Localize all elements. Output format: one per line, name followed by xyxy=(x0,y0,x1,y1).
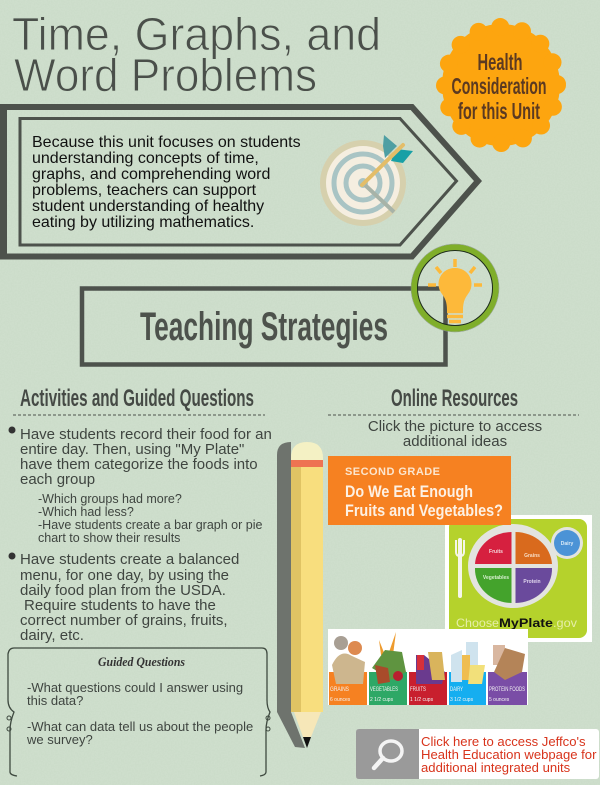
text block: second activity: Have students create a balanced xyxy=(20,551,239,568)
text: jeffco link: Health Education webpage for xyxy=(421,747,597,762)
image: choose my plate xyxy=(445,515,592,642)
text: click the picture xyxy=(368,418,542,450)
text: unit focus: student understanding of healthy xyxy=(32,198,264,215)
image: food groups: FRUITS xyxy=(410,687,426,693)
text block: first activity xyxy=(8,426,272,545)
text: unit focus: understanding concepts of time, xyxy=(32,150,259,167)
badge: health consideration: Health xyxy=(478,49,522,75)
image: food groups: 2 1/2 cups xyxy=(370,697,394,703)
heading: online resources: Online Resources xyxy=(391,385,518,412)
icon: light bulb in green ring xyxy=(411,244,499,332)
heading: guided questions: Guided Questions xyxy=(98,654,185,669)
text block: first activity: -Which had less? xyxy=(38,505,134,519)
image: second grade banner: SECOND GRADE xyxy=(345,466,440,478)
image: food groups: VEGETABLES xyxy=(370,687,398,693)
text block: first activity: -Which groups had more? xyxy=(38,492,182,506)
image: choose my plate: MyPlate xyxy=(499,616,553,630)
heading: activities and guided questions: Activities and Guided Questions xyxy=(20,385,254,412)
text: guided questions list: this data? xyxy=(27,693,83,708)
icon: pencil xyxy=(277,442,323,748)
text: guided questions list: -What questions could I answer using xyxy=(27,680,243,695)
image: choose my plate: Fruits xyxy=(489,549,503,555)
text: click the picture: additional ideas xyxy=(403,433,507,450)
image: food groups: 6 ounces xyxy=(330,697,351,703)
panel: guided questions xyxy=(7,648,270,776)
text: unit focus: problems, teachers can support xyxy=(32,182,257,199)
text block: first activity: entire day. Then, using "My Plate" xyxy=(20,441,244,458)
text block: first activity: chart to show their results xyxy=(38,531,180,545)
image: food groups: 3 1/2 cups xyxy=(450,697,474,703)
text block: second activity xyxy=(8,551,239,644)
callout: jeffco link xyxy=(356,729,599,779)
text: guided questions list xyxy=(26,680,253,747)
image: food groups xyxy=(328,629,528,705)
text block: second activity: correct number of grains, fruits, xyxy=(20,612,228,629)
panel: teaching strategies heading: Teaching Strategies xyxy=(140,305,388,349)
text: guided questions list: we survey? xyxy=(26,732,93,747)
image: food groups: 5 ounces xyxy=(489,697,510,703)
image: food groups: 1 1/2 cups xyxy=(410,697,434,703)
panel: teaching strategies heading xyxy=(82,288,446,364)
image: second grade banner: Do We Eat Enough xyxy=(345,482,473,501)
text: unit focus: eating by utilizing mathematics. xyxy=(32,214,254,231)
arrow panel: unit focus xyxy=(0,104,478,259)
image: choose my plate: Vegetables xyxy=(483,575,509,581)
badge: health consideration: for this Unit xyxy=(458,98,540,124)
text: jeffco link: additional integrated units xyxy=(421,760,571,775)
image: choose my plate: Choose xyxy=(456,616,499,630)
image: choose my plate: .gov xyxy=(553,616,577,630)
text: unit focus xyxy=(32,134,301,231)
image: food groups: GRAINS xyxy=(330,687,349,693)
icon: target with arrow xyxy=(320,135,413,226)
image: food groups: PROTEIN FOODS xyxy=(489,687,525,693)
text block: second activity: menu, for one day, by using the xyxy=(20,567,229,584)
icon: magnifier xyxy=(374,741,402,768)
title xyxy=(12,8,381,101)
text block: second activity: daily food plan from the USDA. xyxy=(20,582,226,599)
text: unit focus: graphs, and comprehending word xyxy=(32,166,270,183)
badge: health consideration xyxy=(442,24,560,146)
text: jeffco link: Click here to access Jeffco's xyxy=(421,734,586,749)
image: choose my plate: Grains xyxy=(524,553,540,559)
text block: first activity: have them categorize the foods into xyxy=(20,456,258,473)
text: jeffco link xyxy=(421,734,597,775)
image: food groups: DAIRY xyxy=(450,687,463,693)
text: guided questions list: -What can data tell us about the people xyxy=(27,719,253,734)
image: choose my plate: Protein xyxy=(523,579,541,585)
text block: second activity: dairy, etc. xyxy=(20,627,84,644)
image: choose my plate: Dairy xyxy=(561,541,573,547)
title: Word Problems xyxy=(14,49,317,101)
text block: second activity: Require students to have the xyxy=(24,597,216,614)
text: unit focus: Because this unit focuses on students xyxy=(32,134,301,151)
image: second grade banner: Fruits and Vegetables? xyxy=(345,501,503,520)
text block: first activity: -Have students create a bar graph or pie xyxy=(38,518,262,532)
text block: first activity: each group xyxy=(20,471,95,488)
image: second grade banner xyxy=(328,456,511,525)
text block: first activity: Have students record their food for an xyxy=(20,426,272,443)
text: click the picture: Click the picture to access xyxy=(368,418,542,435)
title: Time, Graphs, and xyxy=(12,8,381,60)
